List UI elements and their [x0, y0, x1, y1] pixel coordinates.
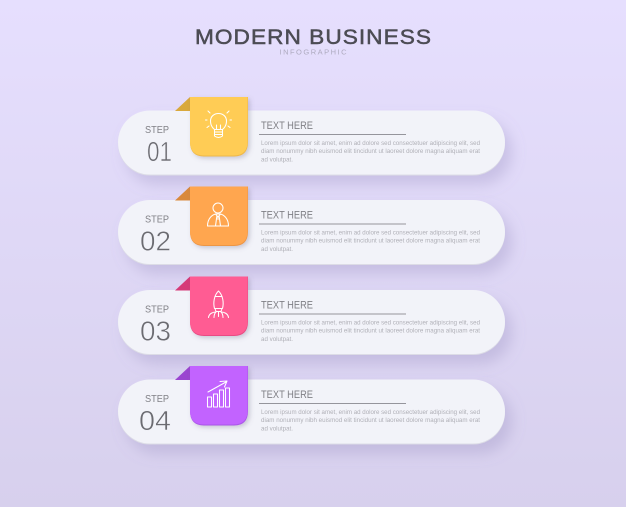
- pill card: [118, 200, 505, 265]
- heading: TEXT HERE: [261, 120, 313, 132]
- tab fold: [175, 276, 190, 290]
- icon: growth chart: [208, 381, 230, 407]
- step number: 03: [140, 316, 171, 346]
- step number: 02: [140, 226, 171, 256]
- subtitle: INFOGRAPHIC: [280, 48, 347, 56]
- divider: [259, 134, 406, 135]
- body text: diam nonummy nibh euismod elit tincidunt ut laoreet dolore magna aliquam erat: [261, 328, 480, 334]
- tab: [190, 366, 248, 426]
- body text: diam nonummy nibh euismod elit tincidunt ut laoreet dolore magna aliquam erat: [261, 148, 480, 155]
- step label: STEP: [145, 214, 169, 226]
- icon: light bulb: [206, 111, 232, 138]
- panel: step 2: [118, 186, 505, 265]
- body text: diam nonummy nibh euismod elit tincidunt ut laoreet dolore magna aliquam erat: [261, 238, 480, 244]
- heading: TEXT HERE: [261, 300, 313, 312]
- panel: step 3: [118, 276, 505, 355]
- body text: ad volutpat.: [261, 246, 293, 253]
- panel: step 4: [118, 366, 505, 444]
- body text: Lorem ipsum dolor sit amet, enim ad dolore sed consectetuer adipiscing elit, sed: [261, 230, 480, 236]
- divider: [259, 314, 406, 315]
- body text: diam nonummy nibh euismod elit tincidunt ut laoreet dolore magna aliquam erat: [261, 417, 480, 424]
- icon: rocket: [208, 291, 228, 318]
- body text: Lorem ipsum dolor sit amet, enim ad dolore sed consectetuer adipiscing elit, sed: [261, 320, 480, 326]
- pill card: [118, 110, 505, 176]
- step label: STEP: [145, 304, 169, 316]
- body text: ad volutpat.: [261, 426, 293, 432]
- tab fold: [175, 97, 190, 111]
- body text: ad volutpat.: [261, 156, 293, 164]
- body text: [261, 140, 480, 164]
- body text: [261, 230, 480, 253]
- body text: Lorem ipsum dolor sit amet, enim ad dolore sed consectetuer adipiscing elit, sed: [261, 140, 480, 147]
- divider: [259, 403, 406, 404]
- body text: Lorem ipsum dolor sit amet, enim ad dolore sed consectetuer adipiscing elit, sed: [261, 409, 480, 416]
- step label: STEP: [145, 393, 169, 405]
- icon: business person: [208, 203, 228, 226]
- body text: [261, 409, 480, 432]
- divider: [259, 224, 406, 225]
- tab: [190, 276, 248, 336]
- step number: 01: [147, 136, 172, 167]
- pill card: [118, 380, 505, 444]
- heading: TEXT HERE: [261, 210, 313, 222]
- body text: [261, 320, 480, 343]
- pill card: [118, 290, 505, 355]
- tab fold: [175, 366, 190, 380]
- step number: 04: [139, 405, 171, 436]
- tab fold: [175, 186, 190, 200]
- body text: ad volutpat.: [261, 336, 293, 343]
- step label: STEP: [145, 124, 169, 136]
- title: MODERN BUSINESS: [195, 25, 431, 49]
- heading: TEXT HERE: [261, 389, 313, 401]
- tab: [190, 97, 248, 156]
- panel: step 1: [118, 97, 505, 176]
- tab: [190, 186, 248, 246]
